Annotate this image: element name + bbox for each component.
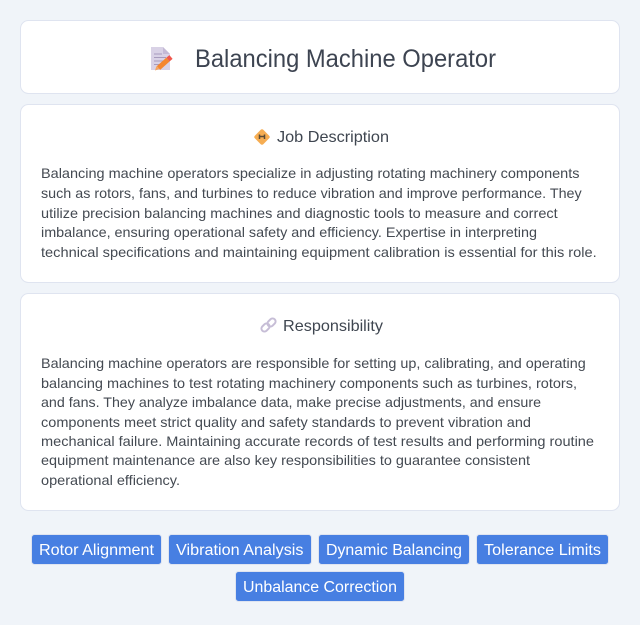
responsibility text: equipment maintenance are also key responsibilities to guarantee consistent [41,452,530,468]
responsibility text: balancing machines to test rotating machinery components such as turbines, rotors, [41,375,577,391]
icon: document with pencil [151,47,171,70]
panel: job description [20,104,620,282]
title text: Balancing Machine Operator [195,45,496,73]
tag: tolerance limits: Tolerance Limits [484,542,601,559]
tags [32,534,608,602]
tag: vibration analysis: Vibration Analysis [176,542,304,559]
heading: responsibility: Responsibility [283,318,383,335]
job description text [41,165,597,260]
panel: responsibility [20,294,620,510]
tag: dynamic balancing: Dynamic Balancing [326,542,462,559]
job description text: utilize precision balancing machines and diagnostic tools to measure and correct [41,205,558,221]
responsibility text: and fans. They analyze imbalance data, make precise adjustments, and ensure [41,394,541,410]
tag: tolerance limits [476,534,608,564]
tag: rotor alignment: Rotor Alignment [39,542,155,559]
responsibility text [41,355,594,488]
tag: vibration analysis [168,534,312,564]
job description text: technical specifications and maintaining equipment calibration is essential for this role. [41,244,597,260]
panel: title [20,20,620,94]
responsibility text: components meet strict quality and safety standards to prevent vibration and [41,414,531,430]
tag: rotor alignment [32,534,162,564]
icon: chain link [260,317,277,333]
job description text: Balancing machine operators specialize in adjusting rotating machinery components [41,165,580,181]
tag: unbalance correction [236,572,404,602]
tag: dynamic balancing [318,534,470,564]
responsibility text: mechanical failure. Maintaining accurate records of test results and performing routine [41,433,594,449]
icon: warning diamond [254,129,270,145]
job description text: imbalance, ensuring operational safety and efficiency. Expertise in interpreting [41,224,537,240]
responsibility text: Balancing machine operators are responsible for setting up, calibrating, and operating [41,355,586,371]
responsibility text: operational efficiency. [41,472,180,488]
heading: job description: Job Description [277,129,389,146]
tag: unbalance correction: Unbalance Correction [243,579,397,596]
job description text: such as rotors, fans, and turbines to reduce vibration and improve performance. They [41,185,582,201]
